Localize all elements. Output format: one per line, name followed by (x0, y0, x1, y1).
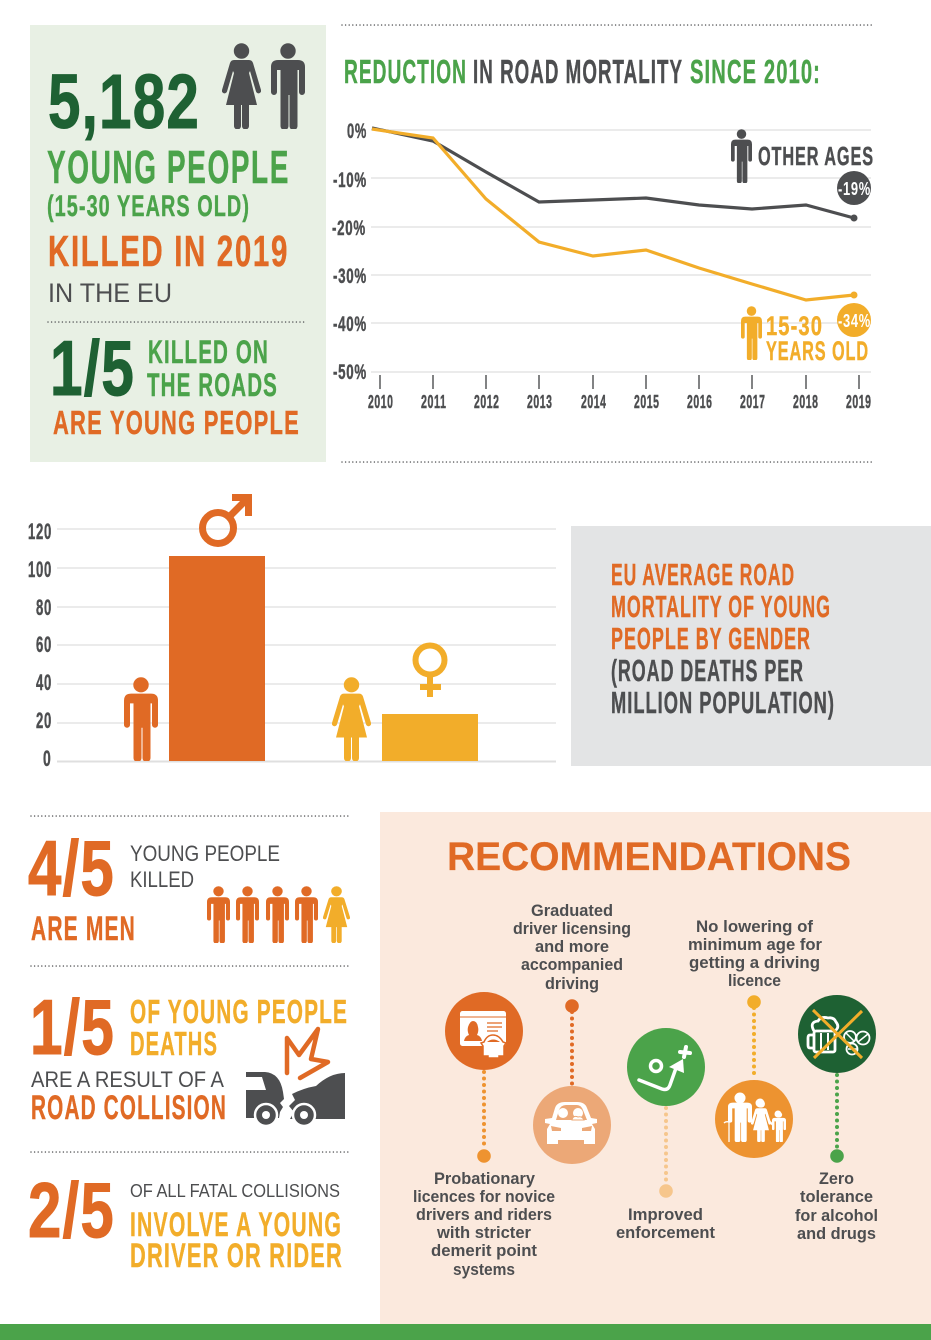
bar chart axis labels: 60 (36, 632, 52, 657)
bar: women (382, 714, 478, 761)
connector: no lowering of age (747, 995, 761, 1078)
bar chart axis labels: 40 (36, 670, 52, 695)
stat: 1/5 road collision: DEATHS (130, 1025, 218, 1062)
text: zero tolerance: and drugs (797, 1225, 876, 1243)
icon: car crash (246, 1029, 345, 1126)
stat: 2/5 fatal collisions: 2/5 (28, 1166, 115, 1254)
text: probationary licences: systems (453, 1261, 515, 1279)
text: zero tolerance (795, 1170, 878, 1243)
x axis labels: 2015 (634, 392, 660, 412)
line chart: road mortality reduction (332, 120, 874, 412)
stat: 4/5 are men: YOUNG PEOPLE (130, 841, 280, 866)
killed on the roads text (147, 334, 278, 403)
bar chart axis labels: 100 (28, 557, 52, 582)
text: zero tolerance: for alcohol (795, 1207, 878, 1225)
text: graduated driver licensing: Graduated (531, 902, 613, 920)
icon: woman yellow (332, 677, 371, 761)
icon: male symbol (202, 497, 249, 544)
bar chart axis labels: 0 (43, 746, 52, 771)
x axis labels (368, 392, 872, 412)
x axis labels: 2012 (474, 392, 500, 412)
y axis labels: -20% (332, 217, 366, 240)
text: probationary licences: with stricter (436, 1224, 532, 1242)
x axis labels: 2017 (740, 392, 766, 412)
bar chart: deaths by gender (28, 497, 556, 771)
text: no lowering of minimum age: getting a driving (689, 954, 820, 972)
footer bar (0, 1324, 931, 1340)
stat: 1/5 road collision: OF YOUNG PEOPLE (130, 993, 348, 1030)
are young people text: ARE YOUNG PEOPLE (53, 404, 300, 441)
x axis labels: 2011 (421, 392, 446, 412)
killed on the roads text: THE ROADS (147, 367, 278, 403)
text: zero tolerance: Zero (819, 1170, 854, 1188)
heading: reduction in road mortality: IN ROAD MORTALITY (473, 53, 683, 90)
icon: car with two occupants (533, 1086, 611, 1164)
stat: 2/5 fatal collisions: OF ALL FATAL COLLISIONS (130, 1180, 340, 1201)
stat: 1/5 road collision: ARE A RESULT OF A (31, 1067, 224, 1092)
icon: woman (222, 43, 261, 129)
young people text: YOUNG PEOPLE (47, 141, 290, 193)
stat: 2/5 fatal collisions (28, 1166, 343, 1275)
text: graduated driver licensing (513, 902, 631, 993)
panel: EU average road mortality: EU AVERAGE ROAD (611, 557, 795, 592)
recommendations title: RECOMMENDATIONS (447, 835, 851, 879)
text: probationary licences (413, 1170, 555, 1279)
heading: reduction in road mortality (344, 53, 821, 90)
icon: enforcement arrow (627, 1028, 705, 1106)
text: no lowering of minimum age: licence (728, 972, 781, 990)
text: zero tolerance: tolerance (800, 1188, 873, 1206)
x axis labels: 2014 (581, 392, 606, 412)
line: 15-30 years old (372, 129, 858, 300)
stat: 4/5 are men: ARE MEN (31, 910, 136, 948)
bar chart axis labels: 20 (36, 708, 52, 733)
x axis labels: 2010 (368, 392, 394, 412)
stat: 2/5 fatal collisions: DRIVER OR RIDER (130, 1237, 343, 1275)
heading: reduction in road mortality: REDUCTION (344, 53, 467, 90)
heading: reduction in road mortality: SINCE 2010: (690, 53, 821, 90)
age range text: (15-30 YEARS OLD) (47, 190, 250, 223)
text: graduated driver licensing: and more (535, 938, 609, 956)
text: probationary licences: drivers and riders (416, 1206, 552, 1224)
x axis labels: 2013 (527, 392, 552, 412)
fraction 1/5: 1/5 (50, 324, 135, 412)
stat: 4/5 are men (28, 824, 350, 948)
text: improved enforcement: Improved (628, 1206, 703, 1224)
text: no lowering of minimum age (688, 918, 823, 990)
text: probationary licences: Probationary (434, 1170, 536, 1188)
text: probationary licences: licences for novice (413, 1188, 555, 1206)
y axis labels: 0% (347, 120, 367, 143)
text: graduated driver licensing: accompanied (521, 956, 623, 974)
y axis labels: -50% (333, 361, 367, 384)
icon: female symbol (416, 646, 444, 697)
x axis labels: 2018 (793, 392, 818, 412)
y axis labels: -30% (333, 265, 367, 288)
text: improved enforcement (616, 1206, 715, 1242)
panel: EU average road mortality (571, 526, 931, 766)
stat: 1/5 road collision: ROAD COLLISION (31, 1089, 227, 1127)
line: other ages (372, 128, 858, 222)
bar chart axis labels: 120 (28, 519, 52, 544)
icon row: four men one woman (207, 886, 350, 944)
panel: young people killed (30, 25, 326, 462)
text: no lowering of minimum age: minimum age for (688, 936, 823, 954)
x axis labels: 2016 (687, 392, 712, 412)
in the EU text: IN THE EU (48, 278, 172, 308)
legend: other ages: -19% (838, 179, 871, 199)
icon: man (271, 43, 305, 130)
icon: family (715, 1080, 793, 1158)
legend: 15-30 years old (741, 303, 871, 366)
legend: 15-30 years old: 15-30 (766, 311, 823, 341)
stat: 1/5 road collision: 1/5 (30, 983, 115, 1071)
text: no lowering of minimum age: No lowering of (696, 918, 814, 936)
y axis labels: -40% (333, 313, 367, 336)
killed on the roads text: KILLED ON (148, 334, 269, 370)
y axis labels: -10% (333, 169, 367, 192)
big number 5,182: 5,182 (48, 59, 200, 145)
text: improved enforcement: enforcement (616, 1224, 715, 1242)
connector: probationary licences (477, 1072, 491, 1163)
connector: graduated licensing (565, 999, 579, 1084)
stat: 2/5 fatal collisions: INVOLVE A YOUNG (130, 1206, 342, 1244)
killed in 2019 text: KILLED IN 2019 (48, 227, 289, 276)
y axis labels (332, 120, 367, 384)
x axis labels: 2019 (846, 392, 872, 412)
connector: improved enforcement (659, 1108, 673, 1198)
bar chart axis labels: 80 (36, 595, 52, 620)
text: graduated driver licensing: driver licensing (513, 920, 631, 938)
icon: man orange (124, 677, 158, 762)
panel: recommendations (380, 812, 931, 1324)
icon: licence card (445, 992, 523, 1070)
legend: 15-30 years old: -34% (838, 311, 871, 331)
stat: 4/5 are men: KILLED (130, 867, 194, 892)
stat: 4/5 are men: 4/5 (28, 824, 115, 912)
connector: zero tolerance (830, 1075, 844, 1163)
bar: men (169, 556, 265, 761)
bar chart axis labels (28, 519, 52, 771)
legend: other ages (731, 129, 874, 205)
text: graduated driver licensing: driving (545, 975, 599, 993)
icon: no alcohol or drugs (798, 995, 876, 1073)
stat: 1/5 road collision (30, 983, 348, 1127)
text: probationary licences: demerit point (431, 1242, 537, 1260)
